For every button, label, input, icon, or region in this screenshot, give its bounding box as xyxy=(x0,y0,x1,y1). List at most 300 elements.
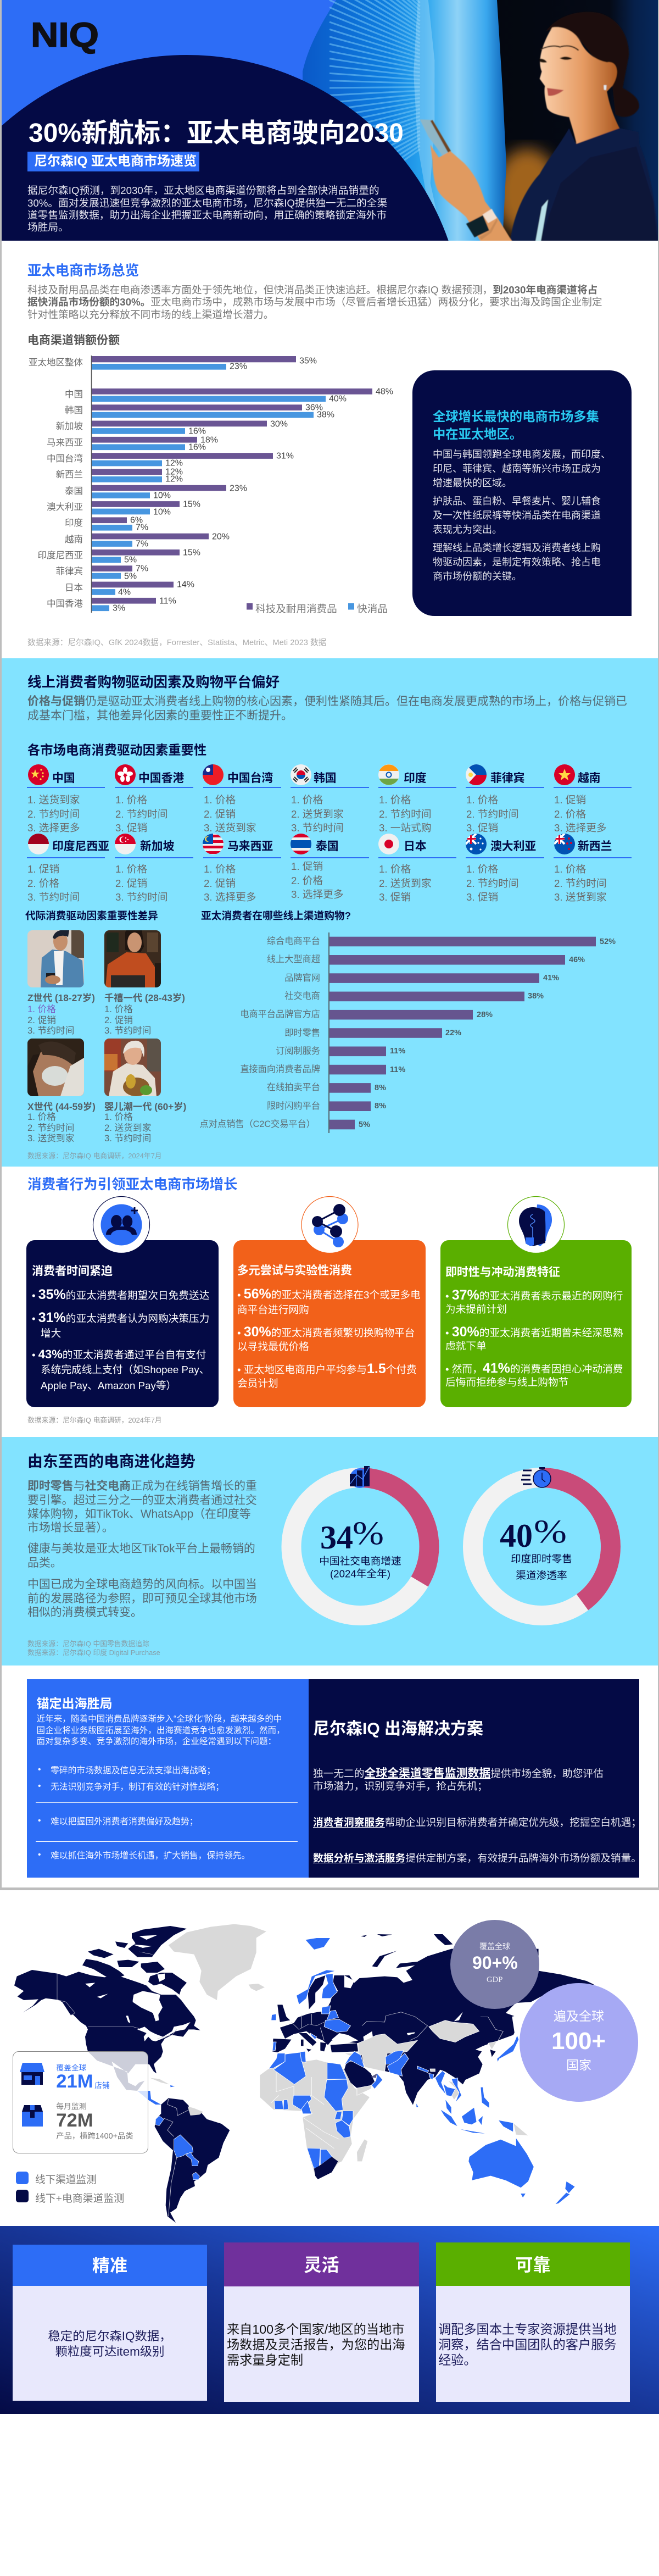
problem list: 难以把握国外消费者消费偏好及趋势； xyxy=(51,1817,198,1826)
label: Gen X: X世代 (44-59岁) xyxy=(27,1101,96,1112)
chart: donut 34 percent xyxy=(277,1462,443,1629)
list: South Korea xyxy=(291,794,344,834)
bar chart: online channels: 38% xyxy=(528,992,544,1001)
legend swatch xyxy=(16,2172,29,2184)
panel paragraph: 近年来，随着中国消费品牌逐渐步入“全球化”阶段，越来越多的中 xyxy=(36,1714,282,1724)
list: Hong Kong: 3. 促销 xyxy=(115,822,147,834)
list: Boomers: 2. 送货到家 xyxy=(104,1123,151,1133)
bar chart: e-commerce share: 7% xyxy=(136,564,148,574)
trends paragraph 1: 即时零售与社交电商正成为在线销售增长的重 xyxy=(27,1480,257,1492)
list: Malaysia: 2. 促销 xyxy=(204,878,236,889)
bar chart: e-commerce share: 40% xyxy=(329,395,347,403)
photo: Gen X man xyxy=(27,1039,84,1096)
bar chart: e-commerce share: 中国台湾 xyxy=(47,453,83,464)
bullets: 后悔而拒绝参与线上购物节 xyxy=(445,1376,568,1388)
list: Japan: 2. 送货到家 xyxy=(379,878,432,889)
list: Gen X xyxy=(27,1112,74,1144)
list: Malaysia: 1. 价格 xyxy=(204,863,236,875)
list: Thailand: 2. 价格 xyxy=(291,875,323,886)
label: New Zealand: 新西兰 xyxy=(578,840,612,853)
list: Philippines: 3. 促销 xyxy=(466,822,498,834)
bar chart: e-commerce share: 新加坡 xyxy=(56,421,83,431)
list: Boomers: 3. 节约时间 xyxy=(104,1133,151,1143)
list: Indonesia: 1. 促销 xyxy=(27,863,59,875)
card text xyxy=(13,2329,207,2360)
list: China: 2. 节约时间 xyxy=(27,808,80,820)
neck and face xyxy=(540,27,619,144)
chart: donut 34 percent: 中国社交电商增速 xyxy=(319,1555,401,1567)
label: Taiwan: 中国台湾 xyxy=(227,772,273,785)
list: Malaysia: 3. 选择更多 xyxy=(204,891,256,903)
legend swatch xyxy=(16,2190,29,2202)
trends paragraph 2 xyxy=(27,1542,255,1570)
bullets: • 31%的亚太消费者认为网购决策压力 xyxy=(32,1310,209,1325)
bar chart: e-commerce share: 38% xyxy=(317,410,334,420)
stat caption: 产品，横跨1400+品类 xyxy=(56,2132,133,2141)
north america xyxy=(14,1970,200,2091)
label: China: 中国 xyxy=(52,772,75,785)
trends paragraph 3: 前的发展路径为参照，即可预见全球其他市场 xyxy=(27,1592,257,1605)
list: China xyxy=(27,794,80,834)
bullets: • 亚太地区电商用户平均参与1.5个付费 xyxy=(237,1361,417,1376)
solution: analytics: 数据分析与激活服务提供定制方案，有效提升品牌海外市场份额及销量。 xyxy=(313,1852,641,1864)
bar chart: e-commerce share: 马来西亚 xyxy=(47,437,83,448)
list: Japan xyxy=(379,863,432,903)
callout paragraph 2 xyxy=(433,496,601,535)
problem list: 难以抓住海外市场增长机遇，扩大销售，保持领先。 xyxy=(51,1851,250,1861)
world map xyxy=(0,1890,659,2226)
title: 30%新航标：亚太电商驶向2030 xyxy=(29,119,404,148)
trends paragraph 3 xyxy=(27,1578,257,1619)
label: Malaysia: 马来西亚 xyxy=(227,840,273,853)
bar chart: e-commerce share: 中国 xyxy=(65,389,83,399)
icon: flag Australia xyxy=(466,834,487,854)
bullets: 系统完成线上支付（如Shopee Pay、 xyxy=(41,1364,209,1375)
list: China: 1. 送货到家 xyxy=(27,794,80,806)
list: Taiwan: 3. 送货到家 xyxy=(204,822,256,834)
bar chart: e-commerce share: 18% xyxy=(200,435,218,445)
hero paragraph: 30%。面对发展迅速但竞争激烈的亚太电商市场，尼尔森IQ提供独一无二的全渠 xyxy=(27,197,387,209)
dark semicircle xyxy=(0,55,464,610)
card text: 洞察，结合中国团队的客户服务 xyxy=(438,2338,617,2352)
solution: retail data: 独一无二的全球全渠道零售监测数据提供市场全貌，助您评估 xyxy=(313,1767,604,1780)
bar chart: e-commerce share: 菲律宾 xyxy=(56,566,83,576)
hero paragraph: 道零售监测数据，助力出海企业把握亚太电商新动向，用正确的策略锁定海外市 xyxy=(27,209,387,221)
phone xyxy=(420,119,459,171)
bullets: • 37%的亚太消费者表示最近的网购行 xyxy=(445,1287,623,1303)
chart: donut 34 percent: 34 xyxy=(320,1519,353,1556)
list: Taiwan: 2. 促销 xyxy=(204,808,236,820)
icon: growth chart xyxy=(350,1466,370,1488)
label: Singapore: 新加坡 xyxy=(140,840,174,853)
bar chart: e-commerce share xyxy=(29,356,393,614)
bar chart: e-commerce share: 7% xyxy=(136,540,148,548)
icon: flag Taiwan xyxy=(203,764,224,785)
chart: donut 34 percent: (2024年全年) xyxy=(330,1568,390,1579)
callout paragraph 1: 中国与韩国领跑全球电商发展，而印度、 xyxy=(433,448,611,459)
bullets: 会员计划 xyxy=(237,1378,278,1389)
heading: east to west: 由东至西的电商进化趋势 xyxy=(27,1453,196,1470)
list: Hong Kong xyxy=(115,794,168,834)
card text: 稳定的尼尔森IQ数据， xyxy=(48,2329,172,2343)
bar chart: e-commerce share: 日本 xyxy=(65,582,83,593)
bar chart: online channels: 22% xyxy=(445,1029,461,1037)
card: precise xyxy=(13,2245,207,2401)
problem list xyxy=(27,1762,309,1877)
bar chart: online channels: 41% xyxy=(543,974,559,982)
bar chart: e-commerce share: 12% xyxy=(165,467,183,477)
card title: 可靠 xyxy=(515,2255,550,2275)
bar chart: e-commerce share: 14% xyxy=(177,580,194,589)
south africa xyxy=(314,2157,338,2179)
drivers paragraph: 成基本门槛，其他差异化因素的重要性正不断提升。 xyxy=(27,709,293,722)
label: Boomers: 婴儿潮一代 (60+岁) xyxy=(104,1101,186,1112)
bar chart: e-commerce share: 5% xyxy=(124,571,137,581)
stat label: 覆盖全球 xyxy=(56,2064,86,2072)
bar chart: e-commerce share: 30% xyxy=(270,420,288,429)
bar chart: e-commerce share: 新西兰 xyxy=(56,469,83,480)
chart title: 电商渠道销额份额 xyxy=(27,334,120,346)
legend text: 线下渠道监测 xyxy=(35,2174,97,2185)
circle: GDP coverage xyxy=(450,1920,539,2009)
flags and market lists xyxy=(27,764,632,903)
bar chart: online channels: 46% xyxy=(569,956,585,964)
callout paragraph 2: 护肤品、蛋白粉、早餐麦片、婴儿辅食 xyxy=(433,496,601,507)
row 1 underlines xyxy=(27,787,632,788)
hair xyxy=(546,12,639,117)
bullets: Apple Pay、Amazon Pay等） xyxy=(41,1380,176,1391)
card title: 精准 xyxy=(92,2256,127,2275)
problem list: • xyxy=(38,1816,41,1825)
bar chart: e-commerce share: 15% xyxy=(183,548,200,557)
list: Australia: 2. 节约时间 xyxy=(466,878,519,889)
bar chart: e-commerce share: 6% xyxy=(130,515,143,525)
lakes and bays xyxy=(85,1935,191,2041)
trends paragraph 3: 相似的消费模式转变。 xyxy=(27,1606,142,1619)
bar chart: e-commerce share: 35% xyxy=(299,356,317,366)
seas xyxy=(315,1975,518,2053)
central america and caribbean xyxy=(137,2091,161,2105)
south korea xyxy=(490,2050,496,2057)
list: Hong Kong: 2. 节约时间 xyxy=(115,808,168,820)
overview paragraph: 据快消品市场份额的30%。亚太电商市场中，成熟市场与发展中市场（尽管后者增长迅猛）两极分化，要求出海及跨国企业制定 xyxy=(27,296,602,308)
icon: share network xyxy=(301,1196,359,1254)
bar chart: e-commerce share: 10% xyxy=(153,491,171,500)
list: India xyxy=(379,794,432,834)
list: Singapore: 2. 促销 xyxy=(115,878,147,889)
list: Millennials: 1. 价格 xyxy=(104,1004,133,1014)
list: Vietnam: 3. 选择更多 xyxy=(554,822,607,834)
bar chart: e-commerce share: 15% xyxy=(183,500,200,509)
trends paragraph 2: 品类。 xyxy=(27,1557,62,1569)
panel paragraph xyxy=(36,1714,285,1747)
label: Thailand: 泰国 xyxy=(316,840,339,853)
subheading: market drivers: 各市场电商消费驱动因素重要性 xyxy=(27,743,206,757)
bar chart: e-commerce share: 科技及耐用消费品 xyxy=(255,603,337,614)
list: New Zealand xyxy=(554,863,607,903)
subtitle text: 尼尔森IQ 亚太电商市场速览 xyxy=(34,154,197,169)
bar chart: e-commerce share: 4% xyxy=(118,588,131,597)
solution: consumer insight: 消费者洞察服务帮助企业识别目标消费者并确定优先级，挖掘空白机遇； xyxy=(313,1817,641,1828)
list: Gen Z xyxy=(27,1004,74,1036)
africa xyxy=(260,2059,370,2179)
bar chart: e-commerce share: 韩国 xyxy=(65,405,83,415)
icon: light bulb xyxy=(507,1196,565,1254)
stat: products: 72M xyxy=(56,2110,93,2131)
list: South Korea: 3. 节约时间 xyxy=(291,822,344,834)
label: Millennials: 千禧一代 (28-43岁) xyxy=(104,992,185,1003)
bar chart: e-commerce share: 5% xyxy=(124,555,137,565)
panel: card time-pressed xyxy=(26,1240,219,1407)
label: Indonesia: 印度尼西亚 xyxy=(52,840,109,853)
list: South Korea: 1. 价格 xyxy=(291,794,323,806)
legend: offline monitoring xyxy=(16,2172,104,2184)
arabia xyxy=(344,2062,375,2088)
callout heading: 中在亚太地区。 xyxy=(433,427,522,441)
list: Singapore xyxy=(115,863,168,903)
circle text: 遍及全球 xyxy=(554,2009,604,2023)
card: flexible xyxy=(224,2242,419,2402)
bar chart: e-commerce share: 36% xyxy=(305,403,323,412)
callout paragraph 2: 表现尤为突出。 xyxy=(433,524,502,535)
page frame bottom xyxy=(0,1887,659,1890)
list: Millennials: 2. 促销 xyxy=(104,1015,133,1025)
bullets: 以寻找最优价格 xyxy=(237,1341,309,1352)
icon: flag Thailand xyxy=(291,834,311,854)
heading: consumer behaviour: 消费者行为引领亚太电商市场增长 xyxy=(27,1177,238,1192)
bar chart: online channels: 点对点销售（C2C交易平台） xyxy=(200,1119,315,1129)
bar chart: e-commerce share: 16% xyxy=(188,426,206,436)
list: Gen X: 1. 价格 xyxy=(27,1112,56,1122)
bar chart: e-commerce share: 快消品 xyxy=(357,603,388,614)
list: New Zealand: 1. 价格 xyxy=(554,863,586,875)
trends paragraph 2: 健康与美妆是亚太地区TikTok平台上最畅销的 xyxy=(27,1542,255,1555)
trends paragraph 3: 中国已成为全球电商趋势的风向标。以中国当 xyxy=(27,1578,257,1591)
arctic islands xyxy=(148,1973,187,1995)
photo: boomer woman xyxy=(104,1039,161,1096)
bullets: • 35%的亚太消费者期望次日免费送达 xyxy=(32,1287,209,1302)
card heading: 即时性与冲动消费特征 xyxy=(445,1266,560,1278)
list: South Korea: 2. 送货到家 xyxy=(291,808,344,820)
card text xyxy=(438,2322,617,2368)
panel heading: 尼尔森IQ 出海解决方案 xyxy=(313,1720,483,1738)
shirt xyxy=(510,128,659,242)
bar chart: online channels: 品牌官网 xyxy=(284,973,320,983)
list: Thailand: 1. 促销 xyxy=(291,860,323,872)
bar chart: online channels: 综合电商平台 xyxy=(267,936,320,946)
bullets: 为未提前计划 xyxy=(445,1303,507,1315)
bar chart: e-commerce share: 11% xyxy=(159,597,176,606)
list: Hong Kong: 1. 价格 xyxy=(115,794,147,806)
icon: flag Singapore xyxy=(115,834,136,854)
list: Singapore: 3. 节约时间 xyxy=(115,891,168,903)
photo: millennial woman xyxy=(104,930,161,987)
row 2 underlines xyxy=(27,857,632,858)
list: Taiwan: 1. 价格 xyxy=(204,794,236,806)
bullets xyxy=(440,1240,632,1407)
label: Philippines: 菲律宾 xyxy=(490,772,524,785)
list: Gen Z: 1. 价格 xyxy=(27,1004,56,1014)
list: Gen Z: 3. 节约时间 xyxy=(27,1025,74,1036)
list: Gen X: 3. 送货到家 xyxy=(27,1133,74,1143)
photo: Gen Z man xyxy=(27,930,84,987)
metric: 90+% xyxy=(472,1953,518,1973)
panel: light blue consumer section xyxy=(2,658,658,1167)
problem list: 零碎的市场数据及信息无法支撑出海战略； xyxy=(51,1766,215,1775)
panel: hero xyxy=(2,0,658,241)
gray countries xyxy=(344,2020,528,2136)
bar chart: online channels: 电商平台品牌官方店 xyxy=(240,1009,320,1019)
card text: 来自100多个国家/地区的当地市 xyxy=(227,2322,404,2336)
icon: store xyxy=(20,2063,45,2085)
bar chart: e-commerce share: 23% xyxy=(230,484,247,493)
eurasia xyxy=(280,1949,594,2105)
bar chart: e-commerce share: 越南 xyxy=(65,534,83,545)
list: Japan: 1. 价格 xyxy=(379,863,411,875)
list: Boomers: 1. 价格 xyxy=(104,1112,133,1122)
callout paragraph 2: 及一次性纸尿裤等快消品类在电商渠道 xyxy=(433,510,601,521)
bar chart: e-commerce share: 泰国 xyxy=(65,486,83,496)
problem list: • xyxy=(38,1850,41,1859)
icon: flag Indonesia xyxy=(28,834,49,854)
list: India: 3. 一站式购 xyxy=(379,822,432,834)
hero paragraph: 场胜局。 xyxy=(27,221,69,233)
source note: 数据来源：尼尔森IQ 电商调研，2024年7月 xyxy=(27,1152,162,1160)
bar chart: e-commerce share: 12% xyxy=(165,475,183,484)
card header xyxy=(13,2245,207,2286)
bullets: • 然而，41%的消费者因担心冲动消费 xyxy=(445,1361,623,1376)
list: Australia: 1. 价格 xyxy=(466,863,498,875)
watch xyxy=(466,215,489,237)
card heading: 多元尝试与实验性消费 xyxy=(237,1264,352,1277)
card header xyxy=(224,2242,419,2286)
list: Japan: 3. 促销 xyxy=(379,891,411,903)
panel: NIQ solution xyxy=(309,1679,639,1878)
bar chart: online channels: 28% xyxy=(477,1011,493,1019)
solution: retail data xyxy=(313,1767,604,1793)
list: Indonesia xyxy=(27,863,80,903)
iberia xyxy=(272,2039,292,2052)
icon: flag Malaysia xyxy=(203,834,224,854)
label: Hong Kong: 中国香港 xyxy=(138,772,184,785)
source notes: 数据来源：尼尔森IQ 印度 Digital Purchase xyxy=(27,1648,160,1657)
card title: 灵活 xyxy=(304,2255,339,2275)
list: Indonesia: 2. 价格 xyxy=(27,878,59,889)
heading: market overview: 亚太电商市场总览 xyxy=(27,263,139,279)
bullets: • 30%的亚太消费者近期曾未经深思熟 xyxy=(445,1324,623,1340)
chart: donut 40 percent: 渠道渗透率 xyxy=(516,1569,567,1581)
callout heading xyxy=(433,409,599,441)
bar chart: online channels: 直接面向消费者品牌 xyxy=(240,1064,320,1074)
list: Boomers xyxy=(104,1112,151,1144)
list: India: 2. 节约时间 xyxy=(379,808,432,820)
hand and forearm xyxy=(431,145,512,242)
bar chart: online channels: 8% xyxy=(375,1084,386,1092)
list: Millennials: 3. 节约时间 xyxy=(104,1025,151,1036)
bar chart: online channels: 8% xyxy=(375,1102,386,1111)
logo: NIQ: NIQ xyxy=(31,16,99,54)
list: Singapore: 1. 价格 xyxy=(115,863,147,875)
greece and balkans xyxy=(320,2042,327,2051)
bar chart: e-commerce share: 中国香港 xyxy=(47,598,83,609)
bar chart: online channels xyxy=(198,929,626,1137)
overview paragraph: 针对性策略以充分释放不同市场的线上渠道增长潜力。 xyxy=(27,309,273,320)
list: Malaysia xyxy=(204,863,256,903)
icon: flag South Korea xyxy=(291,764,311,785)
solution: retail data: 市场潜力，识别竞争对手，抢占先机； xyxy=(313,1780,488,1792)
bullets: • 30%的亚太消费者频繁切换购物平台 xyxy=(237,1324,415,1340)
bullets xyxy=(233,1240,426,1407)
list: Vietnam xyxy=(554,794,607,834)
panel: value band xyxy=(0,2226,659,2414)
chart: donut 40 percent: 印度即时零售 xyxy=(511,1553,572,1565)
problem list: 无法识别竞争对手，制订有效的针对性战略； xyxy=(51,1783,224,1792)
list: India: 1. 价格 xyxy=(379,794,411,806)
italy xyxy=(299,2033,316,2046)
trends paragraph 1: 市场增长显著）。 xyxy=(27,1522,114,1534)
list: Australia: 3. 促销 xyxy=(466,891,498,903)
callout paragraph 3: 商市场份额的关键。 xyxy=(433,571,522,582)
panel: anchoring overseas success xyxy=(27,1679,309,1878)
chart: donut 34 percent: % xyxy=(353,1515,384,1551)
bar chart: online channels: 11% xyxy=(390,1065,405,1074)
icon: flag Japan xyxy=(378,834,399,854)
card text xyxy=(227,2322,405,2368)
panel paragraph: 面对复杂多变、竞争激烈的海外市场，企业经常遇到以下问题： xyxy=(36,1737,276,1746)
label: Vietnam: 越南 xyxy=(578,772,601,785)
callout: fastest growing markets xyxy=(412,370,632,616)
subheading: generations: 代际消费驱动因素重要性差异 xyxy=(25,910,158,921)
south america xyxy=(155,2098,230,2223)
list: Philippines xyxy=(466,794,519,834)
legend text: 线下+电商渠道监测 xyxy=(35,2192,124,2205)
bar chart: e-commerce share: 印度 xyxy=(65,518,83,528)
list: Thailand: 3. 选择更多 xyxy=(291,889,344,900)
panel paragraph: 国企业将业务版图拓展至海外，出海赛道竞争也愈发激烈。然而， xyxy=(36,1725,285,1735)
subheading: channels: 亚太消费者在哪些线上渠道购物? xyxy=(201,910,351,921)
bullets: • 43%的亚太消费者通过平台自有支付 xyxy=(32,1347,206,1361)
list: Vietnam: 2. 价格 xyxy=(554,808,586,820)
callout heading: 全球增长最快的电商市场多集 xyxy=(433,409,599,424)
metric: 100+ xyxy=(551,2028,606,2055)
callout paragraph 1: 印尼、菲律宾、越南等新兴市场正成为 xyxy=(433,463,601,474)
icon: stopwatch xyxy=(521,1467,551,1487)
bar chart: e-commerce share: 31% xyxy=(276,452,294,460)
turkey xyxy=(331,2043,358,2052)
bar chart: online channels: 社交电商 xyxy=(284,991,320,1001)
icon: flag China xyxy=(28,764,49,785)
icon: flag India xyxy=(378,764,399,785)
bar chart: e-commerce share: 10% xyxy=(153,508,171,517)
list: Millennials xyxy=(104,1004,151,1036)
bullets: • 56%的亚太消费者选择在3个或更多电 xyxy=(237,1286,421,1302)
source note: 数据来源：尼尔森IQ、GfK 2024数据，Forrester、Statista、Metric、Meti 2023 数据 xyxy=(27,639,326,647)
callout paragraph 3: 物驱动因素，是制定有效策略、抢占电 xyxy=(433,557,601,568)
drivers paragraph: 价格与促销仍是驱动亚太消费者线上购物的核心因素，便利性紧随其后。但在电商发展更成熟的市场上，价格与促销已 xyxy=(27,695,627,708)
list: Taiwan xyxy=(204,794,256,834)
hero paragraph xyxy=(27,185,387,233)
panel: light blue trends section xyxy=(2,1437,658,1665)
list: Indonesia: 3. 节约时间 xyxy=(27,891,80,903)
source note: 数据来源：尼尔森IQ 电商调研，2024年7月 xyxy=(27,1416,162,1424)
label: Gen Z: Z世代 (18-27岁) xyxy=(27,992,95,1003)
panel: card impulse xyxy=(440,1240,632,1407)
source notes xyxy=(27,1640,160,1657)
card header xyxy=(436,2242,630,2286)
panel heading: 锚定出海胜局 xyxy=(36,1696,112,1710)
hero photo: woman with phone before LED wall xyxy=(2,0,658,241)
stat unit: 店铺 xyxy=(94,2081,110,2090)
